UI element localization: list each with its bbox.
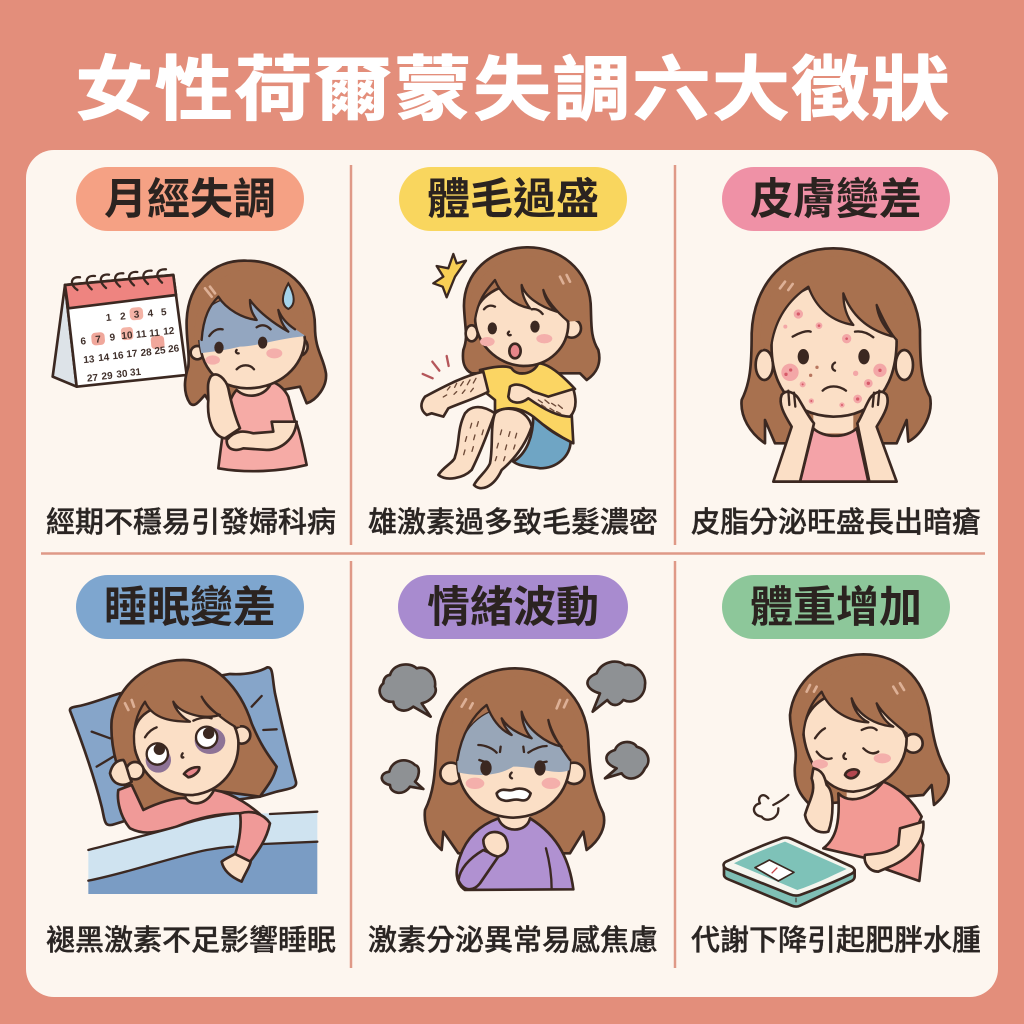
icon: sigh puff: [754, 795, 788, 820]
icon: calendar: 25: [154, 345, 167, 357]
caption: 雄激素過多致毛髮濃密: [368, 506, 658, 539]
heading pill: [398, 575, 628, 639]
heading pill: 月經失調: [104, 176, 276, 224]
icon: calendar: 7: [95, 334, 102, 346]
heading pill: 皮膚變差: [750, 176, 922, 224]
caption: 代謝下降引起肥胖水腫: [691, 924, 981, 957]
icon: calendar: 13: [83, 354, 95, 366]
panel: excess body hair: [368, 167, 658, 539]
heading pill: 體重增加: [750, 584, 922, 632]
heading pill: [399, 167, 627, 231]
heading pill: 睡眠變差: [104, 584, 276, 632]
icon: calendar: 5: [161, 307, 167, 319]
title: 女性荷爾蒙失調六大徵狀: [75, 51, 951, 129]
heading pill: 情緒波動: [427, 584, 599, 632]
panel: poor sleep: [46, 575, 336, 957]
icon: calendar: 9: [109, 332, 116, 344]
icon: calendar: 11: [149, 328, 161, 340]
heading pill: [722, 575, 950, 639]
icon: calendar: 10: [121, 330, 133, 342]
icon: calendar: 31: [130, 367, 142, 379]
icon: calendar: 2: [120, 311, 127, 323]
icon: calendar: 28: [140, 347, 153, 359]
heading pill: 體毛過盛: [427, 176, 599, 224]
icon: bathroom scale: [724, 837, 855, 907]
icon: calendar: 30: [116, 369, 128, 381]
icon: calendar: 1: [105, 313, 112, 324]
icon: calendar: 12: [163, 326, 175, 338]
main panel: [26, 150, 998, 997]
illustration: girl awake in bed: [70, 660, 317, 894]
heading pill: [722, 167, 950, 231]
heading pill: [76, 575, 304, 639]
icon: calendar: 17: [126, 348, 138, 360]
illustration: tired girl with scale: [724, 654, 949, 907]
icon: calendar: 6: [80, 336, 87, 348]
icon: calendar: 27: [87, 373, 99, 385]
illustration: girl with acne: [741, 248, 931, 482]
illustration: worried girl: [185, 261, 326, 471]
panel: mood swings: [368, 575, 658, 957]
icon: calendar: 26: [168, 343, 180, 355]
icon: calendar: 14: [98, 352, 110, 364]
caption: 激素分泌異常易感焦慮: [368, 924, 658, 957]
illustration: surprised girl with body hair: [421, 247, 599, 488]
icon: calendar: [53, 269, 187, 387]
panel: worse skin: [691, 167, 981, 539]
icon: calendar: 29: [101, 371, 114, 383]
icon: calendar: 3: [133, 309, 140, 321]
heading pill: [76, 167, 304, 231]
caption: 褪黑激素不足影響睡眠: [46, 924, 336, 957]
illustration: anxious girl with clouds: [380, 662, 648, 890]
icon: calendar: 11: [136, 329, 147, 341]
panel: weight gain: [691, 575, 981, 957]
panel: menstrual irregularity: [46, 167, 336, 539]
icon: calendar: 4: [147, 308, 154, 320]
icon: steam clouds: [380, 662, 648, 793]
caption: 皮脂分泌旺盛長出暗瘡: [691, 506, 981, 539]
caption: 經期不穩易引發婦科病: [46, 506, 336, 539]
icon: calendar: 16: [112, 350, 125, 362]
